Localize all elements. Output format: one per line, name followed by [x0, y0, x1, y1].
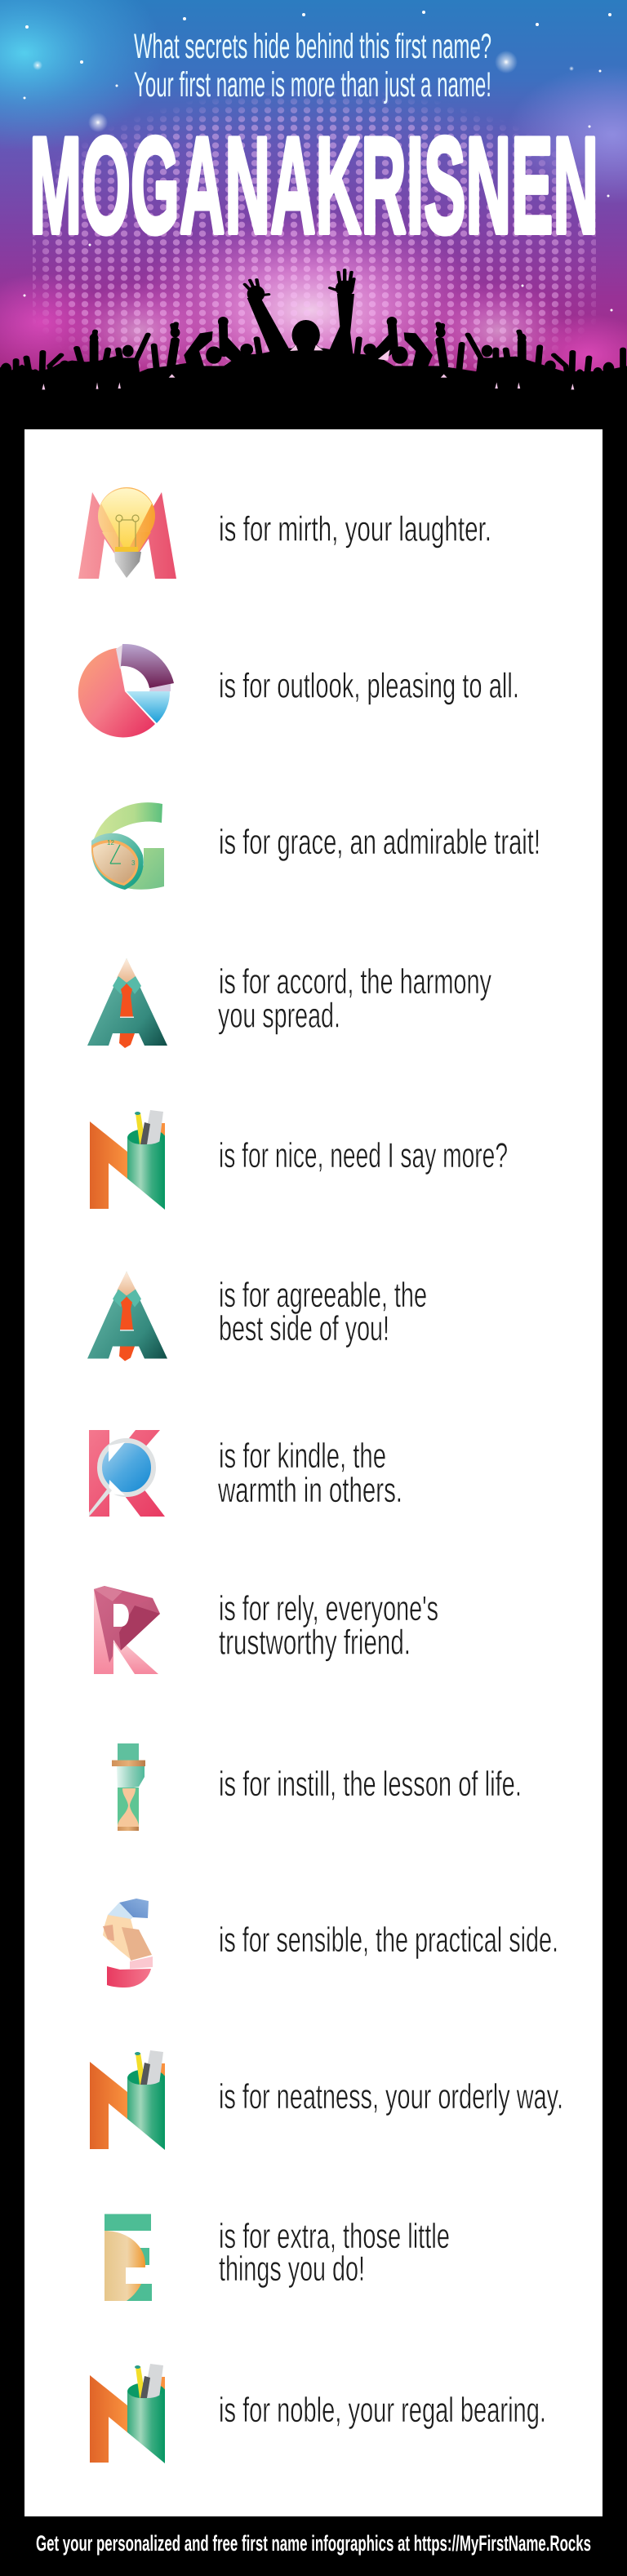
crowd raised fingers and arms: [16, 270, 623, 378]
text: M line: is for mirth, your laughter.: [219, 509, 491, 549]
icon: I hourglass: [112, 1743, 145, 1831]
icon: K magnifier: [89, 1430, 165, 1517]
row 10: S: [103, 1899, 558, 1988]
icon: G clock: 12: [107, 839, 114, 846]
text: A second line: best side of you!: [219, 1309, 389, 1348]
icon: O pie chart: [78, 644, 174, 737]
crowd light gaps: [42, 345, 574, 389]
row 4: A: [87, 958, 491, 1048]
row 11: N: [90, 2050, 563, 2150]
row 12: E: [104, 2214, 450, 2301]
crowd centre figure: [247, 280, 354, 358]
icon: R gem: [94, 1586, 160, 1674]
icon: N pen holder: [90, 2364, 165, 2463]
text: R second line: trustworthy friend.: [219, 1623, 411, 1662]
icon: A necktie: [87, 1272, 167, 1361]
crowd main mass: [0, 349, 627, 435]
row 3: G: [91, 802, 540, 890]
row 1: M: [78, 487, 491, 579]
icon: N pen holder: [90, 1110, 165, 1210]
text: A first line: is for accord, the harmony: [219, 962, 491, 1002]
header panel: concert background: [0, 0, 627, 408]
row 6: A: [87, 1272, 427, 1361]
icon: M light bulb: [78, 487, 176, 579]
row 2: O: [78, 644, 519, 737]
row 5: N: [90, 1110, 508, 1210]
crowd silhouette: [0, 270, 627, 435]
row 13: N: [90, 2364, 546, 2463]
text: A second line: you spread.: [218, 996, 340, 1035]
crowd fists and heads: [0, 317, 614, 379]
icon: A necktie: [87, 958, 167, 1048]
icon: N pen holder: [90, 2050, 165, 2150]
row 8: R: [94, 1586, 438, 1674]
text: K second line: warmth in others.: [217, 1471, 402, 1510]
icon: S handshake: [103, 1899, 153, 1988]
icon: G clock: [91, 802, 164, 890]
text: E second line: things you do!: [219, 2250, 365, 2289]
text: A first line: is for agreeable, the: [219, 1276, 427, 1315]
text: K first line: is for kindle, the: [219, 1437, 386, 1476]
icon: G clock: 3: [131, 859, 136, 867]
text: R first line: is for rely, everyone's: [219, 1589, 438, 1628]
panel: letters list: [24, 429, 603, 2516]
row 7: K: [89, 1430, 402, 1517]
icon: E coin: [104, 2214, 154, 2301]
text: E first line: is for extra, those little: [219, 2217, 450, 2256]
row 9: I: [112, 1743, 522, 1831]
